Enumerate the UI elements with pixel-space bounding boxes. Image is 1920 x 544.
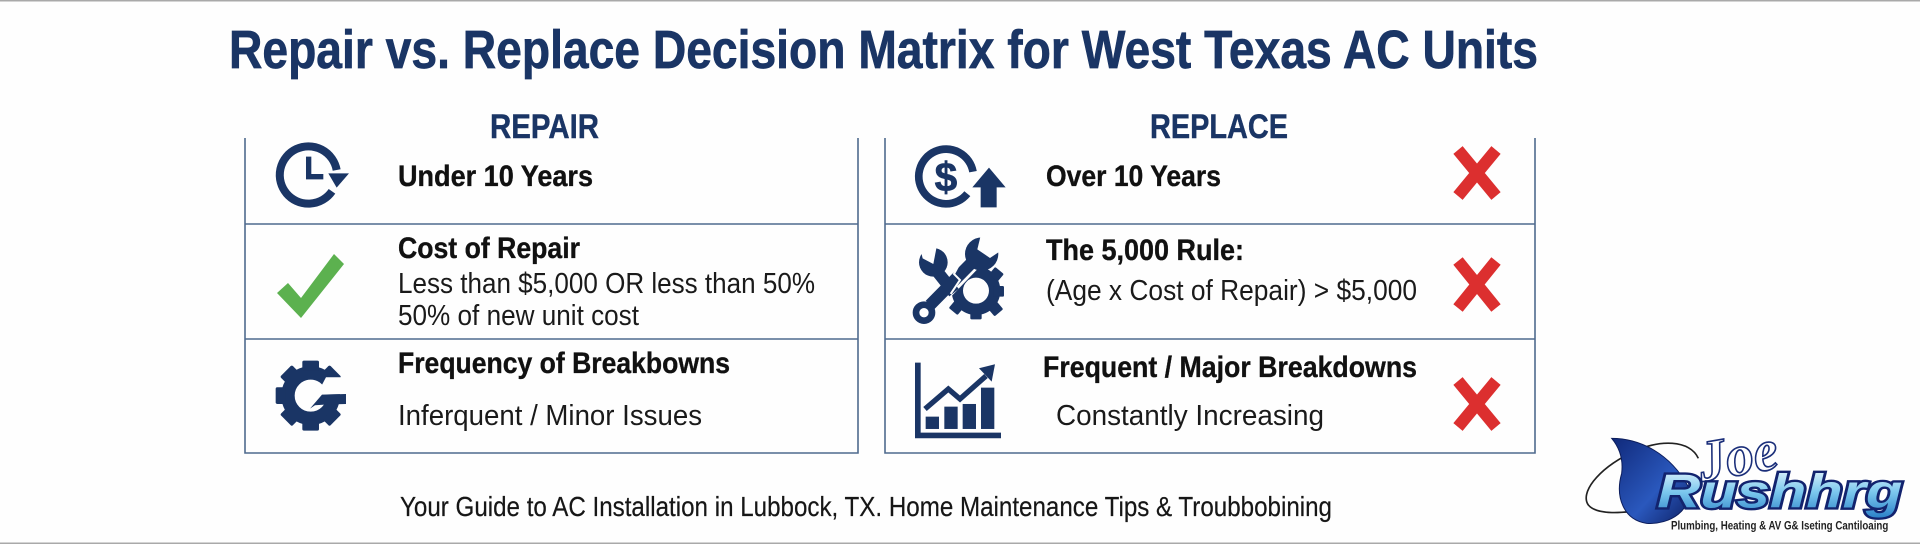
logo [1586,417,1902,532]
icon: red x 1 [1458,150,1496,196]
text: the 5,000 rule: (Age x Cost of Repair) > $5,000 [1046,275,1417,307]
text: frequency of breakdowns: Frequency of Breakbowns [398,347,730,380]
icon: dollar with up arrow: $ [935,154,958,200]
text: over 10 years: Over 10 Years [1046,160,1221,193]
title: Repair vs. Replace Decision Matrix for West Texas AC Units [229,20,1538,80]
text: frequent major breakdowns: Frequent / Major Breakdowns [1043,351,1417,384]
text: cost of repair: Cost of Repair [398,232,580,265]
logo wordmark: Rushhrg [1657,465,1902,518]
icon: clock [280,146,349,204]
heading: repair: REPAIR [490,108,599,146]
panel: replace [885,138,1535,453]
footer text: Your Guide to AC Installation in Lubbock, TX. Home Maintenance Tips & Troubbobining [400,491,1332,522]
text: cost of repair [398,232,815,332]
icon: gear [276,361,347,431]
text: the 5,000 rule: The 5,000 Rule: [1046,234,1244,267]
logo script name: Joe [1692,417,1783,495]
icon: dollar with up arrow [919,149,1006,207]
logo droplet [1612,438,1689,523]
text: under 10 years: Under 10 Years [398,160,593,193]
heading: replace: REPLACE [1150,108,1288,146]
icon: green check [277,254,344,318]
panel: repair [245,138,858,453]
text: cost of repair: Less than $5,000 OR less than 50% [398,268,815,300]
text: cost of repair: 50% of new unit cost [398,300,639,332]
icon: red x 2 [1458,261,1496,308]
text: constantly increasing: Constantly Increasing [1056,400,1324,432]
icon: red x 3 [1458,381,1496,427]
icon: wrenches and gear [916,232,1004,321]
logo swoosh [1586,443,1698,513]
text: the 5,000 rule [1046,234,1417,307]
text: infrequent: Inferquent / Minor Issues [398,400,702,432]
icon: rising chart [915,363,1001,438]
